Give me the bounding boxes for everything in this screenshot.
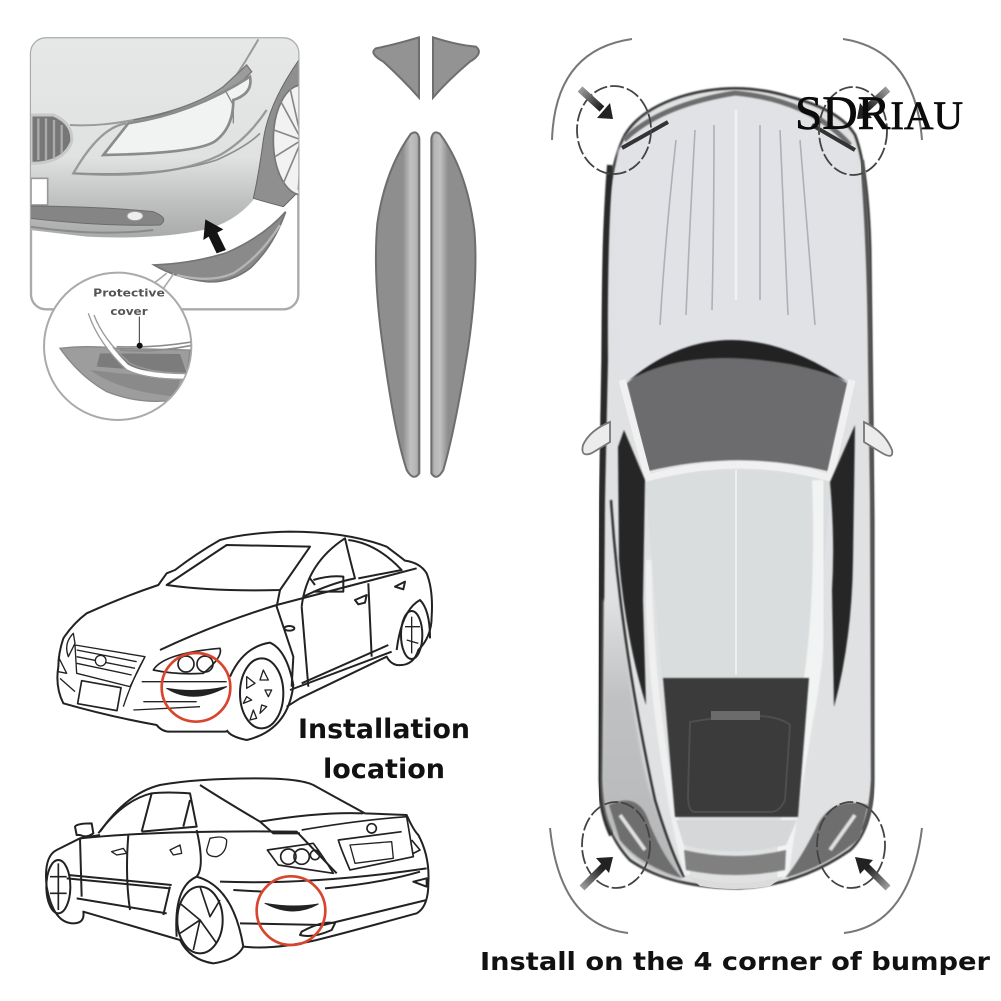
side windows dark stripes	[618, 430, 646, 705]
windscreen	[167, 545, 310, 590]
body outline	[600, 88, 873, 888]
corner markers with dashed ellipses and arrows	[550, 39, 922, 933]
rear side panel	[602, 600, 682, 880]
long right piece	[431, 132, 475, 477]
rounded frame	[31, 38, 298, 309]
boot lid and plate	[302, 817, 420, 870]
headlights	[153, 648, 220, 674]
door handles	[112, 845, 182, 855]
marker: front left	[552, 39, 651, 174]
windscreen	[626, 342, 848, 472]
hood	[615, 92, 860, 390]
right outer dark edge	[862, 160, 873, 830]
product: four guard pieces	[373, 37, 479, 477]
roof	[645, 470, 832, 680]
body outline	[46, 778, 429, 963]
rear windows	[98, 792, 197, 833]
rear wheel	[176, 877, 243, 953]
hood crease lines	[660, 110, 815, 325]
tail light	[267, 843, 333, 873]
marker: front right	[819, 39, 922, 175]
watermark: SDRIAU: SDRIAU	[795, 87, 963, 140]
magnifier circle	[44, 273, 193, 420]
boot lid	[676, 820, 797, 852]
top-view car illustration	[582, 88, 892, 889]
front wheel	[227, 643, 293, 740]
small right piece	[433, 37, 479, 98]
caption: install on the 4 corners: Install on the 4 corner of bumper	[480, 947, 991, 976]
guard piece	[154, 212, 286, 282]
body outline	[57, 532, 432, 732]
windscreen dark band	[626, 340, 849, 383]
rear bumper lines	[220, 868, 427, 936]
long left piece	[376, 132, 419, 477]
rear lights	[609, 800, 682, 878]
line drawing: front three-quarter car	[57, 532, 432, 740]
arrow pointing at bumper	[203, 219, 226, 253]
fuel flap	[207, 837, 227, 857]
panel: bumper close-up with protective cover	[30, 37, 330, 420]
text: installation location: location	[323, 754, 445, 785]
rear window	[663, 678, 809, 817]
line drawing: rear three-quarter car	[46, 778, 429, 963]
grille and front details	[58, 633, 227, 711]
A-pillars and roof bar	[622, 380, 852, 478]
red highlight circle	[257, 876, 325, 945]
left outer dark edge	[600, 165, 612, 835]
text: installation location	[298, 714, 470, 785]
car front illustration	[31, 38, 298, 238]
label: protective cover: Protective	[93, 287, 165, 300]
panel: bumper close-up with protective cover: cover	[110, 305, 148, 318]
bumper guard mark	[167, 687, 227, 696]
door lines and beltline	[160, 568, 417, 687]
text: installation location: Installation	[298, 714, 470, 745]
small left piece	[373, 37, 419, 98]
door handles	[284, 626, 294, 631]
marker: rear right	[817, 802, 922, 933]
front wheel	[46, 860, 70, 913]
mirror	[75, 823, 93, 836]
marker: rear left	[550, 802, 650, 933]
rear wheel	[397, 600, 430, 659]
front bumper edge	[624, 93, 850, 145]
mirrors	[582, 422, 610, 454]
beltline and door lines	[67, 830, 337, 915]
side windows	[302, 538, 402, 607]
rear quarter left line	[611, 500, 684, 877]
rear quarter right swoosh	[780, 480, 821, 878]
red highlight circle	[162, 653, 230, 722]
bumper guard mark	[265, 903, 318, 911]
